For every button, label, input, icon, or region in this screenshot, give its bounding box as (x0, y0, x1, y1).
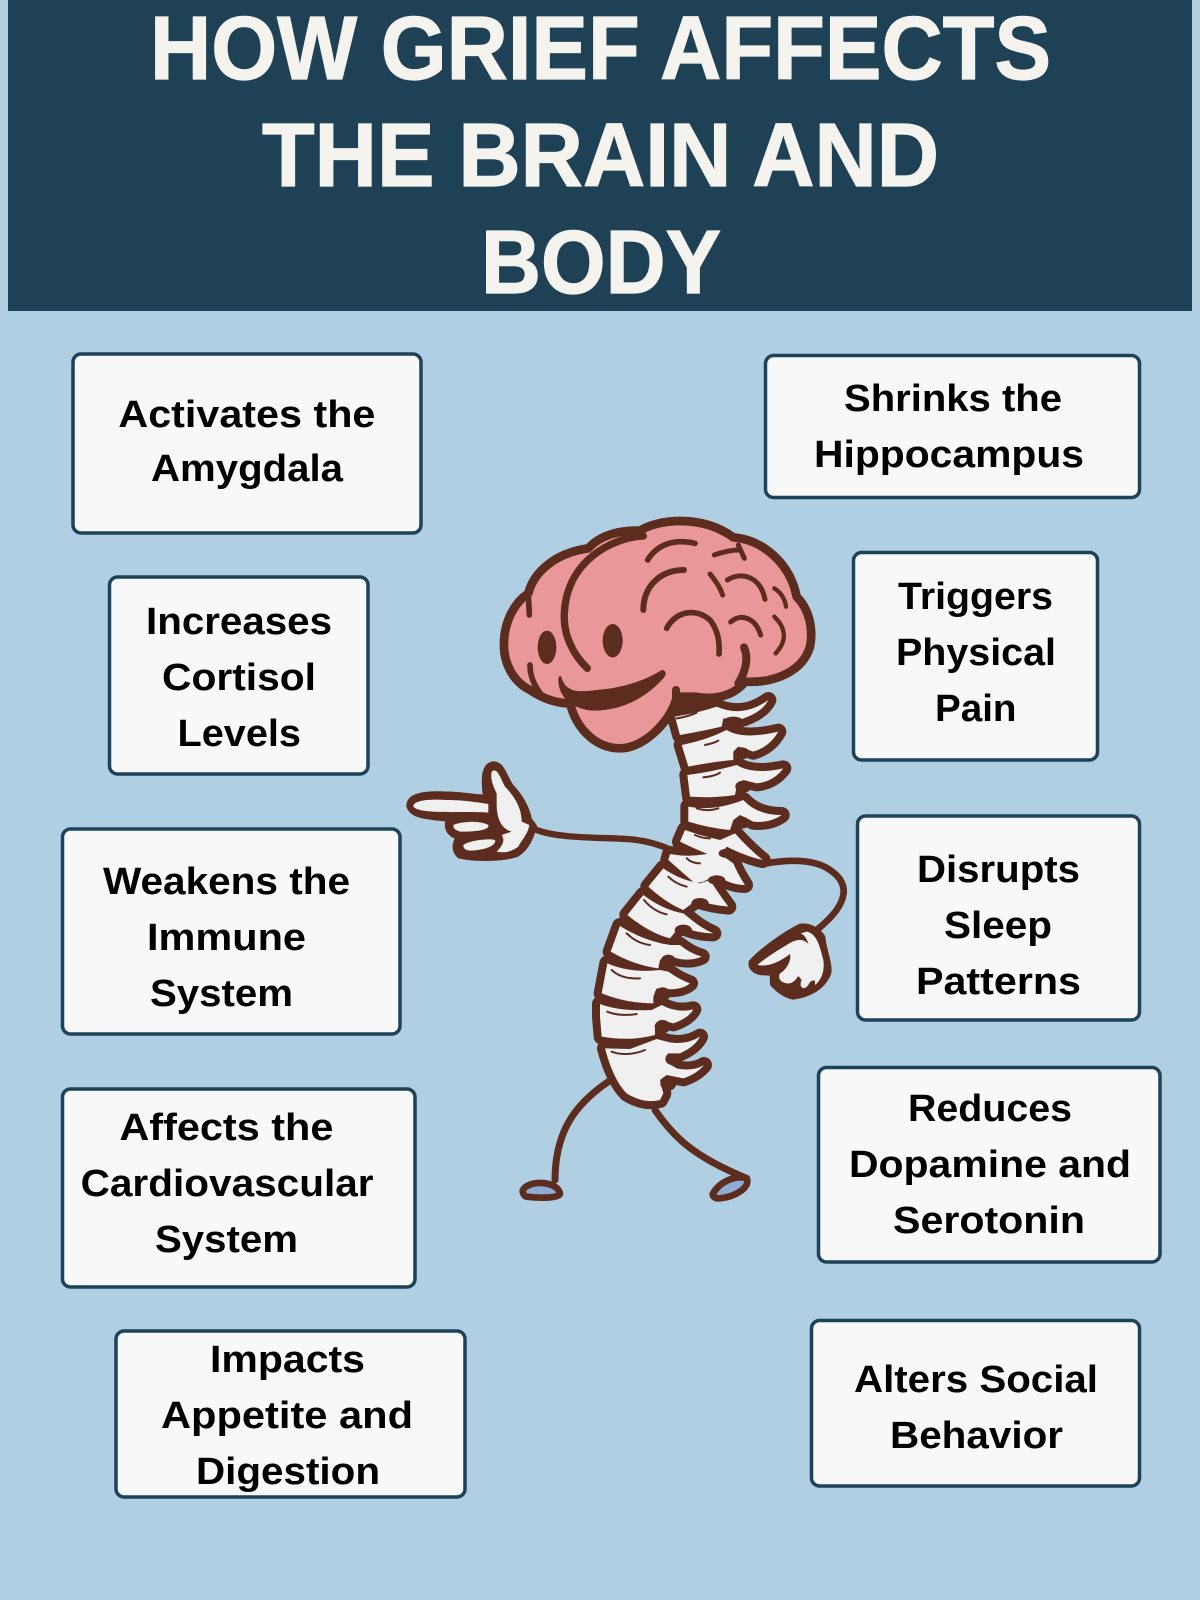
panel: activates the amygdala (73, 354, 421, 533)
left hand (410, 765, 533, 857)
panel: weakens the immune system: Immune (147, 917, 306, 959)
panel: impacts appetite and digestion: Impacts (210, 1339, 365, 1381)
title banner: THE BRAIN AND (262, 106, 939, 206)
panel: disrupts sleep patterns (858, 816, 1140, 1020)
panel: impacts appetite and digestion (116, 1331, 465, 1497)
panel: weakens the immune system: Weakens the (103, 861, 350, 903)
title banner: BODY (481, 213, 721, 313)
panel: shrinks the hippocampus: Shrinks the (844, 378, 1062, 420)
panel: alters social behavior: Behavior (890, 1415, 1063, 1457)
panel: increases cortisol levels: Levels (178, 713, 301, 755)
panel: shrinks the hippocampus (766, 356, 1140, 498)
panel: activates the amygdala: Activates the (118, 394, 375, 436)
panel: reduces dopamine and serotonin (818, 1068, 1160, 1262)
title banner (8, 0, 1192, 313)
panel: affects the cardiovascular system: Cardiovascular (81, 1163, 374, 1205)
panel: weakens the immune system: System (150, 973, 293, 1015)
panel: affects the cardiovascular system: System (155, 1219, 298, 1261)
right hand (750, 925, 830, 998)
panel: reduces dopamine and serotonin: Dopamine and (849, 1144, 1131, 1186)
smiling brain (504, 521, 811, 748)
panel: increases cortisol levels: Cortisol (162, 657, 316, 699)
illustration: smiling brain on a walking spine (410, 521, 844, 1198)
panel: increases cortisol levels (110, 577, 368, 774)
panel: weakens the immune system (62, 829, 400, 1034)
panel: alters social behavior: Alters Social (854, 1359, 1098, 1401)
panel: triggers physical pain (854, 552, 1098, 760)
panel: affects the cardiovascular system (62, 1089, 415, 1287)
panel: alters social behavior (812, 1320, 1140, 1486)
panel: triggers physical pain: Physical (896, 632, 1056, 674)
panel: triggers physical pain: Pain (935, 688, 1016, 730)
spine vertebrae (600, 700, 783, 1101)
panel: impacts appetite and digestion: Appetite and (161, 1395, 413, 1437)
panel: reduces dopamine and serotonin: Reduces (908, 1088, 1072, 1130)
panel: disrupts sleep patterns: Disrupts (917, 849, 1080, 891)
panel: impacts appetite and digestion: Digestion (196, 1451, 380, 1493)
panel: increases cortisol levels: Increases (146, 601, 332, 643)
legs, feet, right arm and left arm (523, 830, 844, 1198)
panel: activates the amygdala: Amygdala (151, 448, 344, 490)
panel: disrupts sleep patterns: Patterns (916, 961, 1081, 1003)
spine outline (600, 700, 783, 1101)
panel: disrupts sleep patterns: Sleep (944, 905, 1052, 947)
panel: reduces dopamine and serotonin: Serotonin (893, 1200, 1085, 1242)
panel: triggers physical pain: Triggers (898, 576, 1053, 618)
title banner: HOW GRIEF AFFECTS (150, 0, 1051, 99)
panel: affects the cardiovascular system: Affects the (119, 1107, 333, 1149)
panel: shrinks the hippocampus: Hippocampus (814, 434, 1084, 476)
